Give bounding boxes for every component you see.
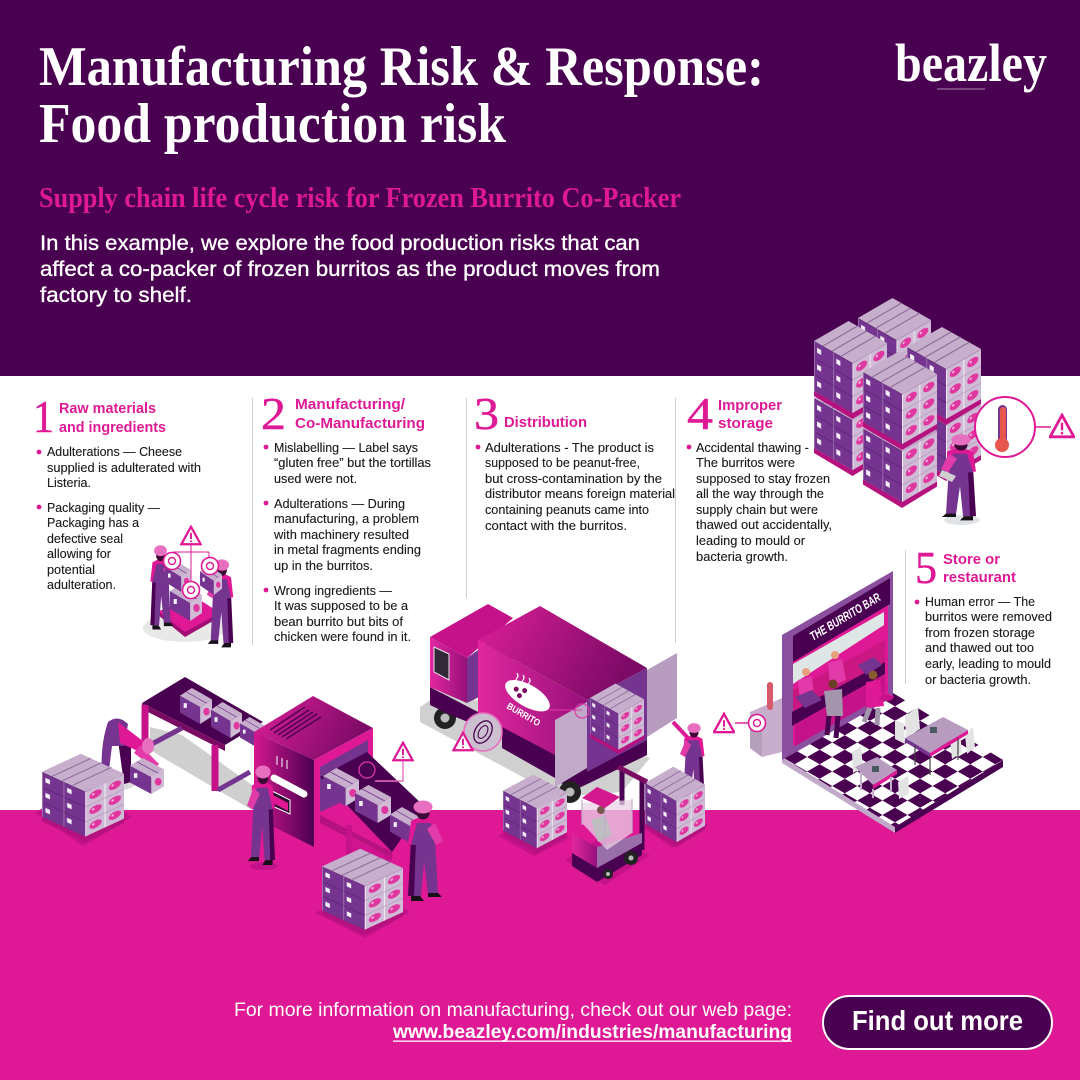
column 3: distribution: 3	[474, 388, 499, 439]
illustration: the burrito bar store	[748, 571, 1003, 833]
column 5: store or restaurant: Store or	[943, 552, 1000, 568]
pallet: truck left stack	[498, 775, 570, 856]
column 2: manufacturing: in metal fragments ending	[274, 542, 421, 557]
column 2: manufacturing: used were not.	[274, 471, 357, 486]
column 4: improper storage: Accidental thawing -	[696, 440, 809, 455]
column 1: raw materials: adulteration.	[47, 577, 116, 592]
icon: warning to store	[714, 714, 748, 732]
pallet: truck right stack	[640, 767, 708, 848]
pallet: bottom stack	[315, 849, 410, 938]
column 5: store or restaurant: Human error — The	[925, 594, 1035, 609]
column 5: store or restaurant: and thawed out too	[925, 640, 1034, 655]
column 4: improper storage: 4	[687, 388, 713, 439]
column 3: distribution: but cross-contamination by the	[485, 471, 662, 486]
column 1: raw materials: Adulterations — Cheese	[47, 444, 182, 459]
illustration: the burrito bar store: THE BURRITO BAR	[807, 590, 883, 644]
column 2: manufacturing: Adulterations — During	[274, 496, 405, 511]
column 2: manufacturing: chicken were found in it.	[274, 629, 411, 644]
logo: beazley: beazley	[895, 33, 1047, 93]
column 2: manufacturing: manufacturing, a problem	[274, 511, 419, 526]
column 2: manufacturing: Co-Manufacturing	[295, 416, 425, 432]
column 2: manufacturing: bean burrito but bits of	[274, 614, 403, 629]
column 4: improper storage: supposed to stay frozen	[696, 471, 830, 486]
column 2: manufacturing: Wrong ingredients —	[274, 583, 392, 598]
intro text: affect a co-packer of frozen burritos as the product moves from	[40, 258, 660, 281]
column 4: improper storage: bacteria growth.	[696, 549, 788, 564]
people: store customers	[824, 670, 893, 738]
column 2: manufacturing	[261, 388, 431, 644]
intro text: factory to shelf.	[40, 284, 192, 307]
column 2: manufacturing: Manufacturing/	[295, 397, 405, 413]
button: find out more: Find out more	[852, 1005, 1023, 1036]
intro text: In this example, we explore the food production risks that can	[40, 232, 640, 255]
column 5: store or restaurant: from frozen storage	[925, 625, 1035, 640]
column 1: raw materials: defective seal	[47, 531, 123, 546]
column 4: improper storage: Improper	[718, 398, 782, 414]
button: find out more	[823, 996, 1052, 1049]
column 1: raw materials: Packaging has a	[47, 515, 140, 530]
column 4: improper storage: supply chain but were	[696, 502, 818, 517]
intro text	[40, 232, 660, 307]
column 5: store or restaurant: restaurant	[943, 570, 1016, 586]
illustration: warehouse pallets	[814, 298, 981, 508]
footer text	[234, 1000, 792, 1043]
column 1: raw materials: Listeria.	[47, 475, 91, 490]
column 1: raw materials: and ingredients	[59, 420, 166, 436]
column 4: improper storage: thawed out accidentally,	[696, 517, 832, 532]
illustration: delivery truck	[420, 604, 677, 803]
worker: bending with box	[102, 718, 164, 794]
worker: warehouse inspector	[939, 434, 980, 525]
column 2: manufacturing: “gluten free” but the tortillas	[274, 455, 431, 470]
column 4: improper storage: leading to mould or	[696, 533, 806, 548]
column 2: manufacturing: up in the burritos.	[274, 558, 373, 573]
footer text: www.beazley.com/industries/manufacturing	[392, 1022, 792, 1043]
column 2: manufacturing: It was supposed to be a	[274, 598, 409, 613]
column 5: store or restaurant: or bacteria growth.	[925, 672, 1031, 687]
panel: header background	[0, 0, 1080, 376]
pallet: left stack	[35, 754, 132, 846]
column 3: distribution: contact with the burritos.	[485, 518, 627, 533]
column 5: store or restaurant: burritos were removed	[925, 609, 1052, 624]
column 1: raw materials: Raw materials	[59, 401, 156, 417]
panel: body background	[0, 376, 1080, 810]
column 5: store or restaurant	[915, 542, 1052, 687]
illustration: delivery truck: BURRITO	[504, 701, 542, 729]
footer text: For more information on manufacturing, check out our web page:	[234, 1000, 792, 1021]
furniture: tables and chairs	[852, 707, 975, 799]
column 4: improper storage	[687, 388, 832, 564]
column 2: manufacturing: with machinery resulted	[273, 527, 409, 542]
column 1: raw materials: supplied is adulterated with	[47, 460, 201, 475]
column 2: manufacturing: 2	[261, 388, 286, 439]
column 4: improper storage: all the way through the	[696, 486, 824, 501]
title: Manufacturing Risk & Response:	[39, 36, 764, 98]
column 3: distribution: Adulterations - The product is	[485, 440, 654, 455]
title	[39, 36, 764, 155]
column 1: raw materials	[33, 391, 201, 592]
column 5: store or restaurant: 5	[915, 542, 937, 593]
worker: conveyor right	[408, 800, 443, 901]
illustration: forklift	[565, 767, 650, 885]
icon: thermometer callout	[975, 397, 1074, 457]
column 3: distribution: supposed to be peanut-free,	[485, 455, 640, 470]
column 4: improper storage: storage	[718, 416, 773, 432]
column 5: store or restaurant: early, leading to mould	[925, 656, 1051, 671]
icon: packaging seal warning	[452, 713, 502, 751]
worker: machine operator	[247, 765, 278, 870]
column 3: distribution: containing peanuts came into	[485, 502, 649, 517]
column 1: raw materials: allowing for	[47, 546, 112, 561]
illustration: conveyor line with machine	[142, 677, 424, 890]
illustration: raw materials inspection	[143, 527, 233, 647]
panel: footer background	[0, 810, 1080, 1080]
worker: at truck door	[673, 722, 704, 800]
column 3: distribution: Distribution	[504, 415, 587, 431]
column 1: raw materials: Packaging quality —	[47, 500, 160, 515]
column 2: manufacturing: Mislabelling — Label says	[274, 440, 418, 455]
column 3: distribution: distributor means foreign material	[485, 486, 675, 501]
column 4: improper storage: The burritos were	[696, 455, 795, 470]
subtitle: Supply chain life cycle risk for Frozen Burrito Co-Packer	[39, 183, 681, 214]
column 1: raw materials: potential	[47, 562, 95, 577]
column 3: distribution	[474, 388, 675, 533]
title: Food production risk	[39, 93, 507, 155]
column 1: raw materials: 1	[33, 391, 54, 442]
